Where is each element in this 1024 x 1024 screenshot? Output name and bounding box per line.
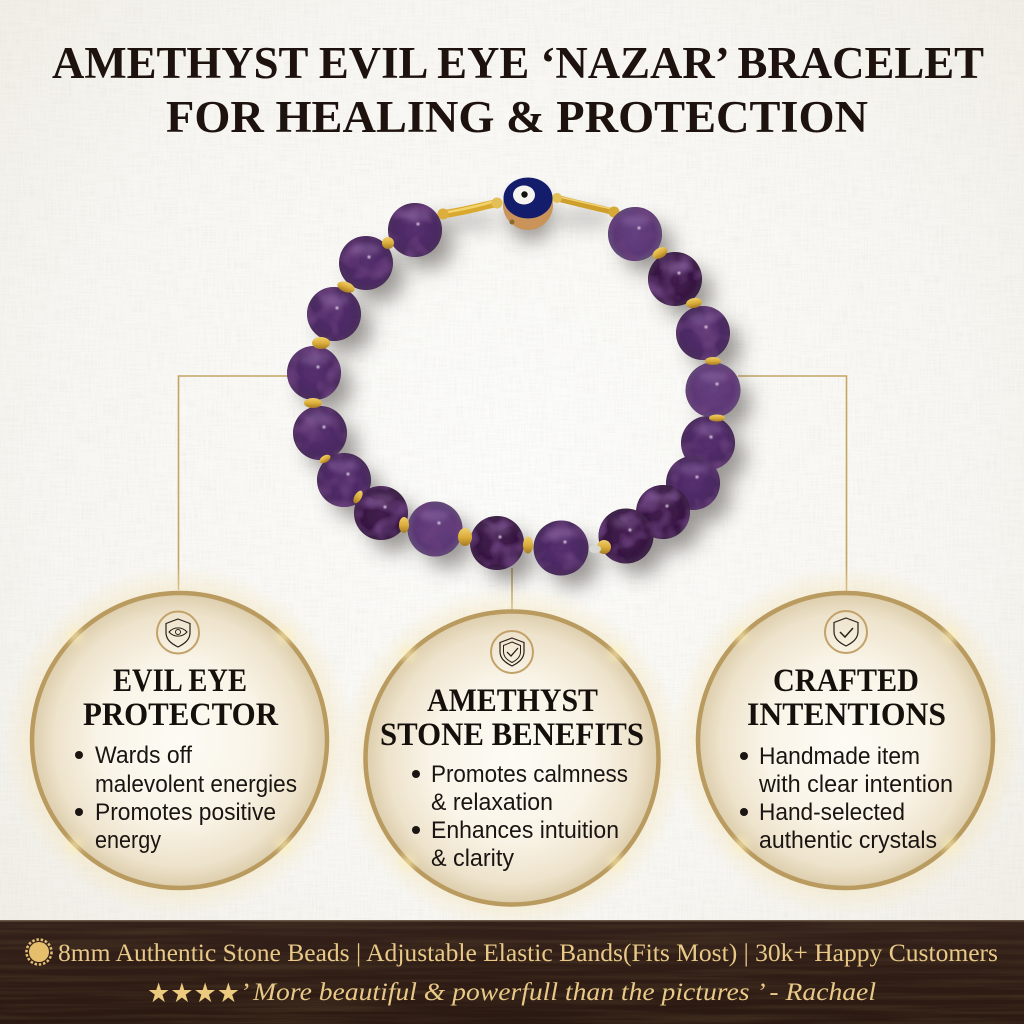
footer bar (0, 920, 1024, 1024)
amethyst beads (287, 203, 740, 576)
bullet list: Handmade item (759, 743, 920, 770)
bullet list: & relaxation (431, 789, 553, 816)
gold tubes (438, 193, 620, 220)
bullet list: authentic crystals (759, 827, 937, 854)
bead sheen (299, 210, 728, 540)
testimonial: ’ More beautiful & powerfull than the pictures ’ - Rachael (240, 979, 876, 1006)
panel: amethyst stone benefits (338, 584, 686, 932)
heading (380, 683, 644, 753)
icon: shield with eye (157, 612, 199, 654)
heading: PROTECTOR (83, 697, 279, 733)
panel: evil eye protector (4, 564, 356, 916)
heading (747, 663, 946, 733)
gold spacers (304, 237, 725, 554)
heading: AMETHYST (427, 683, 598, 719)
icon: shield with check (825, 611, 867, 653)
title: FOR HEALING & PROTECTION (166, 92, 868, 142)
icon: shield with check (491, 631, 533, 673)
icon: gold bead seal (26, 940, 52, 964)
bullet list: with clear intention (758, 771, 953, 798)
bullet list: & clarity (431, 845, 514, 872)
bracelet shadow (302, 197, 751, 587)
bullet list: Hand-selected (759, 799, 905, 826)
bullet list: Wards off (95, 742, 192, 769)
heading: EVIL EYE (113, 663, 247, 699)
bullet list: energy (95, 827, 161, 854)
star rating: ★★★★ (147, 978, 240, 1009)
title: AMETHYST EVIL EYE ‘NAZAR’ BRACELET (52, 38, 984, 88)
heading: STONE BENEFITS (380, 717, 644, 753)
bullet list (412, 761, 628, 872)
panel: crafted intentions (670, 564, 1022, 916)
clear crystal spacer (589, 545, 601, 553)
bullet list (740, 743, 953, 854)
bullet list: malevolent energies (95, 771, 297, 798)
bullet list: Promotes positive (95, 799, 276, 826)
heading (83, 663, 279, 733)
bracelet (287, 178, 751, 587)
heading: INTENTIONS (747, 697, 946, 733)
ring glints (735, 630, 956, 851)
ring glints (69, 630, 290, 851)
bullet list: Enhances intuition (431, 817, 619, 844)
connector lines (178, 376, 846, 611)
title (52, 38, 984, 142)
feature strip: 8mm Authentic Stone Beads | Adjustable Elastic Bands(Fits Most) | 30k+ Happy Customers (58, 940, 998, 967)
heading: CRAFTED (773, 663, 919, 699)
bullet list: Promotes calmness (431, 761, 628, 788)
bead highlights (316, 222, 718, 544)
bullet list (75, 742, 297, 854)
ring glints (402, 648, 622, 868)
evil eye charm (503, 178, 553, 230)
